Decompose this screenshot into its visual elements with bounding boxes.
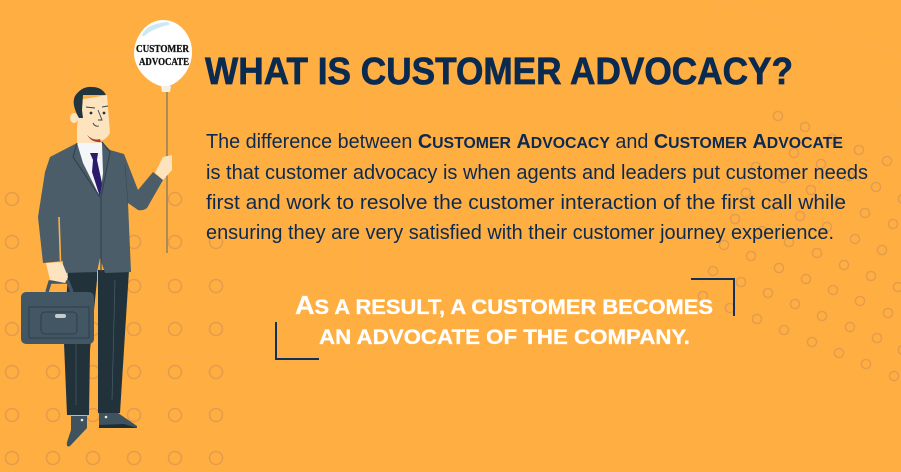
illustration: businessman with balloon and briefcase bbox=[21, 20, 192, 446]
icon: briefcase bbox=[21, 282, 94, 344]
icon: shoes bbox=[67, 413, 137, 446]
icon: trousers bbox=[64, 270, 129, 415]
balloon label: CUSTOMER bbox=[136, 44, 190, 55]
icon: balloon bbox=[134, 20, 192, 92]
text block: definition: first and work to resolve the customer interaction of the first call while bbox=[206, 192, 846, 214]
text block: definition: ensuring they are very satisfied with their customer journey experience. bbox=[206, 222, 834, 244]
icon: balloon string bbox=[166, 92, 168, 253]
bracket: top right bbox=[691, 279, 734, 316]
icon: right hand bbox=[155, 155, 172, 180]
callout: result: AS A RESULT, A CUSTOMER BECOMES bbox=[295, 290, 713, 320]
icon: head bbox=[70, 87, 110, 143]
icon: shirt and tie bbox=[73, 142, 110, 272]
icon: left hand bbox=[46, 262, 68, 283]
icon: jacket bbox=[38, 142, 163, 273]
callout: result bbox=[295, 290, 713, 349]
bracket: bottom left bbox=[276, 322, 319, 359]
balloon label second line: ADVOCATE bbox=[139, 57, 189, 68]
callout: result: AN ADVOCATE OF THE COMPANY. bbox=[319, 326, 690, 349]
text block: definition: is that customer advocacy is when agents and leaders put customer needs bbox=[206, 162, 868, 184]
text block: definition: The difference between CUSTOMER ADVOCACY and CUSTOMER ADVOCATE bbox=[206, 131, 843, 153]
title: WHAT IS CUSTOMER ADVOCACY? bbox=[205, 51, 793, 93]
text block: definition bbox=[206, 131, 868, 244]
